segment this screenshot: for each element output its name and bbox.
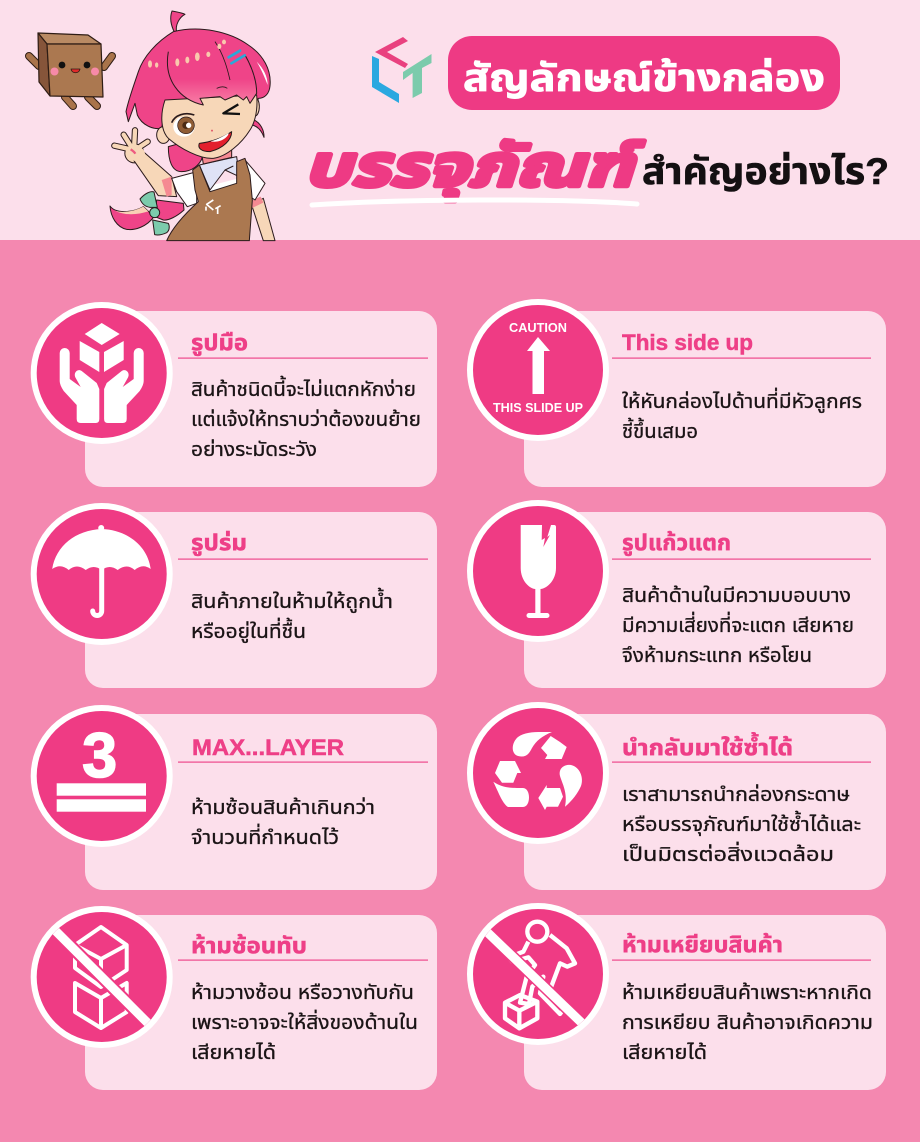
icon: no stepping xyxy=(470,906,606,1042)
description xyxy=(622,783,861,866)
description: ชี้ขึ้นเสมอ xyxy=(622,417,698,443)
description: สินค้าชนิดนี้จะไม่แตกหักง่าย xyxy=(191,375,416,401)
illustration: waving girl xyxy=(110,11,275,241)
braid xyxy=(168,143,202,172)
heading: นำกลับมาใช้ซ้ำได้ xyxy=(622,732,793,760)
apron xyxy=(167,158,252,241)
ribbon tail xyxy=(110,206,154,230)
description: แต่แจ้งให้ทราบว่าต้องขนย้าย xyxy=(191,408,421,431)
shirt xyxy=(172,173,197,207)
right hair lock xyxy=(252,120,264,137)
description: สินค้าด้านในมีความบอบบาง xyxy=(622,584,851,607)
hand xyxy=(114,130,148,163)
bow xyxy=(140,192,157,207)
panel: umbrella xyxy=(34,506,437,688)
description: ห้ามซ้อนสินค้าเกินกว่า xyxy=(191,796,375,819)
bangs xyxy=(167,40,257,105)
description: ห้ามวางซ้อน หรือวางทับกัน xyxy=(191,981,414,1004)
panel: this side up xyxy=(470,302,886,487)
hair highlights xyxy=(148,40,226,68)
description: เป็นมิตรต่อสิ่งแวดล้อม xyxy=(622,841,834,866)
description xyxy=(191,587,393,644)
heading: MAX...LAYER xyxy=(192,735,344,760)
panel: reuse xyxy=(470,705,886,890)
description: ห้ามเหยียบสินค้าเพราะหากเกิด xyxy=(622,981,872,1004)
heading: รูปมือ xyxy=(191,330,248,356)
title pill: สัญลักษณ์ข้างกล่อง xyxy=(463,58,825,100)
nose xyxy=(211,130,213,132)
icon: no stacking xyxy=(34,909,170,1045)
icon: up arrow: CAUTION xyxy=(509,321,567,335)
ears xyxy=(157,127,170,143)
heading: ห้ามเหยียบสินค้า xyxy=(622,932,783,957)
description: ให้หันกล่องไปด้านที่มีหัวลูกศร xyxy=(622,387,862,414)
description: เราสามารถนำกล่องกระดาษ xyxy=(622,783,850,806)
page background xyxy=(0,240,920,1142)
description xyxy=(622,387,862,443)
illustration: box mascot xyxy=(29,33,112,106)
description: เสียหายได้ xyxy=(191,1041,276,1064)
white hair streak xyxy=(257,62,268,85)
open eye xyxy=(172,114,195,137)
panel: max layer xyxy=(34,708,437,890)
heading: ห้ามซ้อนทับ xyxy=(191,933,307,958)
description: การเหยียบ สินค้าอาจเกิดความ xyxy=(622,1011,873,1034)
title pill xyxy=(448,36,840,110)
raised arm xyxy=(134,152,177,197)
panel: do not stack xyxy=(34,909,437,1090)
icon: up arrow xyxy=(470,302,606,438)
heading: รูปร่ม xyxy=(191,530,247,556)
icon: recycle xyxy=(470,705,606,841)
description xyxy=(191,375,421,461)
ahoge xyxy=(171,11,185,33)
description: จำนวนที่กำหนดไว้ xyxy=(191,823,339,849)
description xyxy=(622,584,854,667)
icon: 3 layers: 3 xyxy=(82,721,117,791)
panel: broken glass xyxy=(470,503,886,688)
neck shadow xyxy=(202,148,232,164)
icon: hands holding box xyxy=(34,305,170,441)
description xyxy=(191,796,375,849)
header band xyxy=(0,0,920,240)
panel: hands xyxy=(34,305,437,487)
description: หรือบรรจุภัณฑ์มาใช้ซ้ำได้และ xyxy=(622,810,861,836)
hair clips xyxy=(229,51,245,63)
mouth xyxy=(199,132,232,152)
title underline xyxy=(312,200,637,205)
description: หรืออยู่ในที่ชื้น xyxy=(191,617,306,644)
description: เพราะอาจจะให้สิ่งของด้านใน xyxy=(191,1009,418,1034)
description xyxy=(191,981,418,1064)
description xyxy=(622,981,873,1064)
title: packaging: บรรจุภัณฑ์ xyxy=(304,134,645,202)
icon: 3 layers xyxy=(34,708,170,844)
right arm xyxy=(252,198,275,241)
winking eye xyxy=(223,104,240,114)
description: เสียหายได้ xyxy=(622,1041,707,1064)
logo: LCT cube xyxy=(372,37,432,103)
icon: up arrow: THIS SLIDE UP xyxy=(493,401,583,415)
heading: รูปแก้วแตก xyxy=(622,530,731,556)
description: อย่างระมัดระวัง xyxy=(191,438,317,461)
title: why it matters: สำคัญอย่างไร? xyxy=(642,151,889,192)
description: จึงห้ามกระแทก หรือโยน xyxy=(622,644,812,667)
panel: do not step xyxy=(470,906,886,1090)
description: มีความเสี่ยงที่จะแตก เสียหาย xyxy=(622,611,854,637)
face xyxy=(162,95,257,158)
hair mass xyxy=(126,29,270,129)
icon: umbrella xyxy=(34,506,170,642)
description: สินค้าภายในห้ามให้ถูกน้ำ xyxy=(191,587,393,614)
heading: This side up xyxy=(622,330,753,355)
icon: broken glass xyxy=(470,503,606,639)
